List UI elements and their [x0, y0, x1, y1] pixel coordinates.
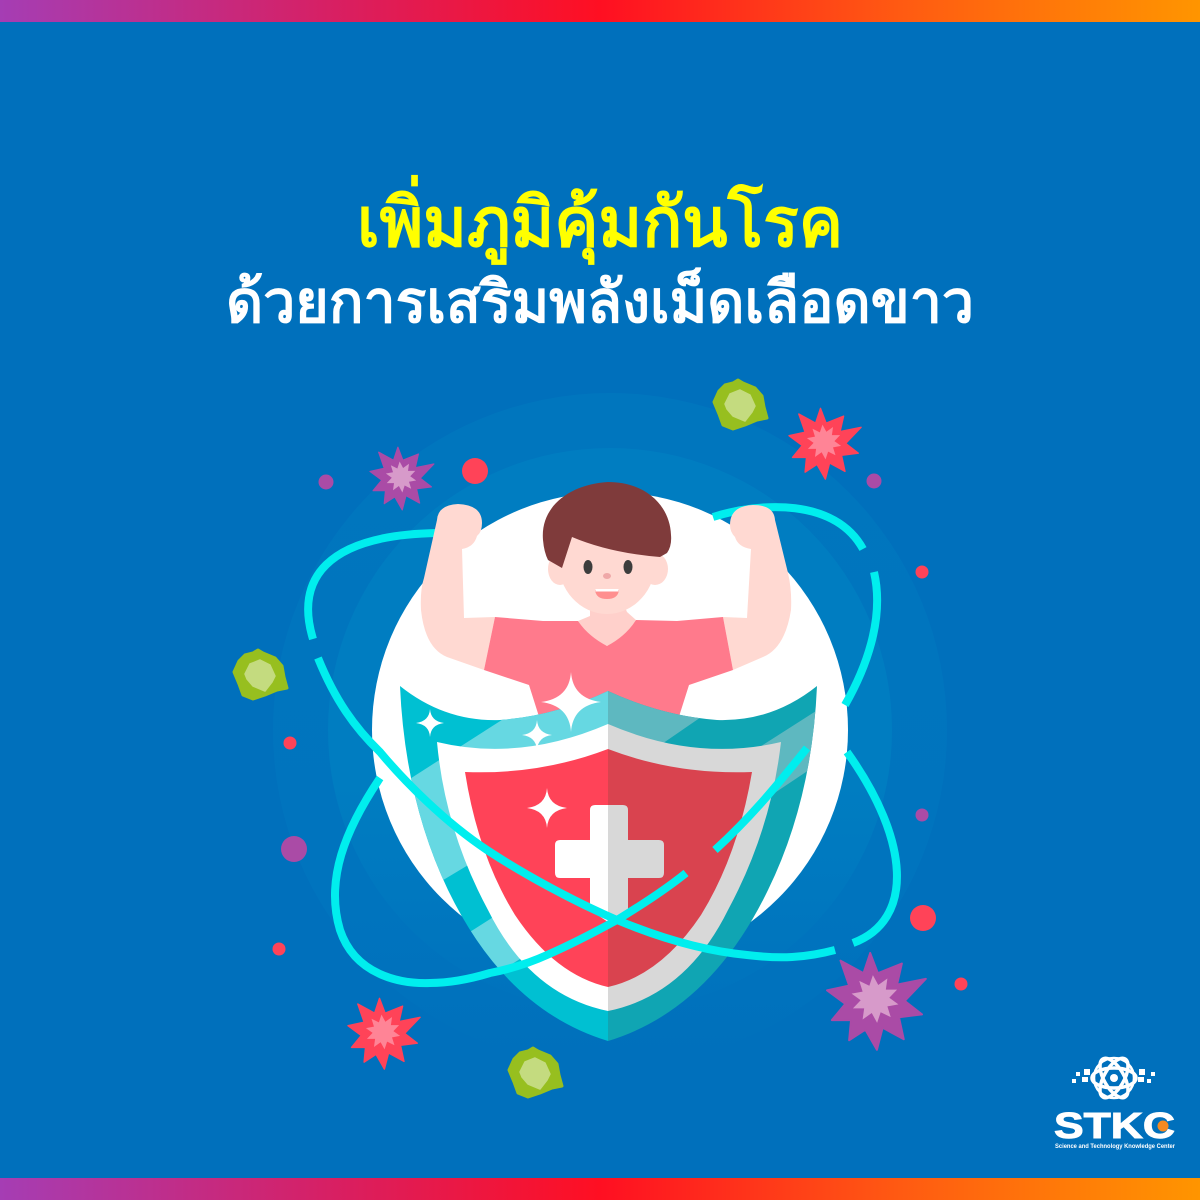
shirt — [484, 617, 733, 745]
sparkle large — [541, 672, 601, 732]
red left — [465, 749, 608, 987]
germ: green top — [714, 380, 767, 429]
right ear — [642, 553, 668, 585]
germ: green bottom — [509, 1048, 562, 1097]
germ: red star top — [789, 408, 861, 479]
face — [558, 506, 656, 614]
logo wordmark: STKC — [1054, 1105, 1175, 1146]
orbit rings in front — [318, 658, 835, 983]
sparkle left — [416, 709, 444, 737]
outer halo — [273, 393, 947, 1067]
teeth — [596, 589, 618, 592]
left ear — [548, 553, 572, 585]
inner shield left — [437, 724, 608, 1011]
red right — [608, 749, 752, 987]
germ: purple star top — [370, 447, 434, 510]
boy — [421, 482, 791, 745]
left arm — [421, 504, 495, 670]
subtitle: ด้วยการเสริมพลังเม็ดเลือดขาว — [226, 267, 974, 335]
shield — [400, 672, 817, 1041]
cross left — [555, 805, 608, 922]
neck — [578, 605, 636, 646]
nose — [603, 573, 611, 579]
right arm — [723, 505, 791, 670]
title: เพิ่มภูมิคุ้มกันโรค — [357, 174, 843, 266]
sparkle middle — [522, 720, 552, 750]
cross right — [608, 805, 664, 922]
white circle — [372, 492, 848, 968]
left eye — [584, 560, 592, 574]
logo: STKC — [1054, 1054, 1176, 1150]
orbit rings behind figure — [308, 507, 897, 943]
right eye — [624, 560, 632, 574]
shield light bands — [411, 691, 816, 968]
inner shield right — [608, 724, 781, 1011]
shield outer right half — [608, 686, 817, 1041]
germ: red star bottom — [348, 998, 420, 1069]
sparkle on red — [527, 788, 567, 828]
germ: purple star bottom — [827, 953, 926, 1050]
logo tagline: Science and Technology Knowledge Center — [1055, 1144, 1176, 1150]
hair — [543, 482, 671, 568]
mouth — [595, 590, 619, 599]
floating dots — [272, 458, 968, 990]
germ: green left — [234, 650, 287, 699]
illustration: immune boy with shield — [304, 448, 901, 1041]
logo atom icon — [1072, 1054, 1155, 1102]
inner halo — [328, 448, 892, 1012]
shield outer left half — [400, 686, 608, 1041]
top gradient bar — [0, 0, 1200, 22]
bottom gradient bar — [0, 1178, 1200, 1200]
logo orange dot — [1158, 1120, 1168, 1132]
